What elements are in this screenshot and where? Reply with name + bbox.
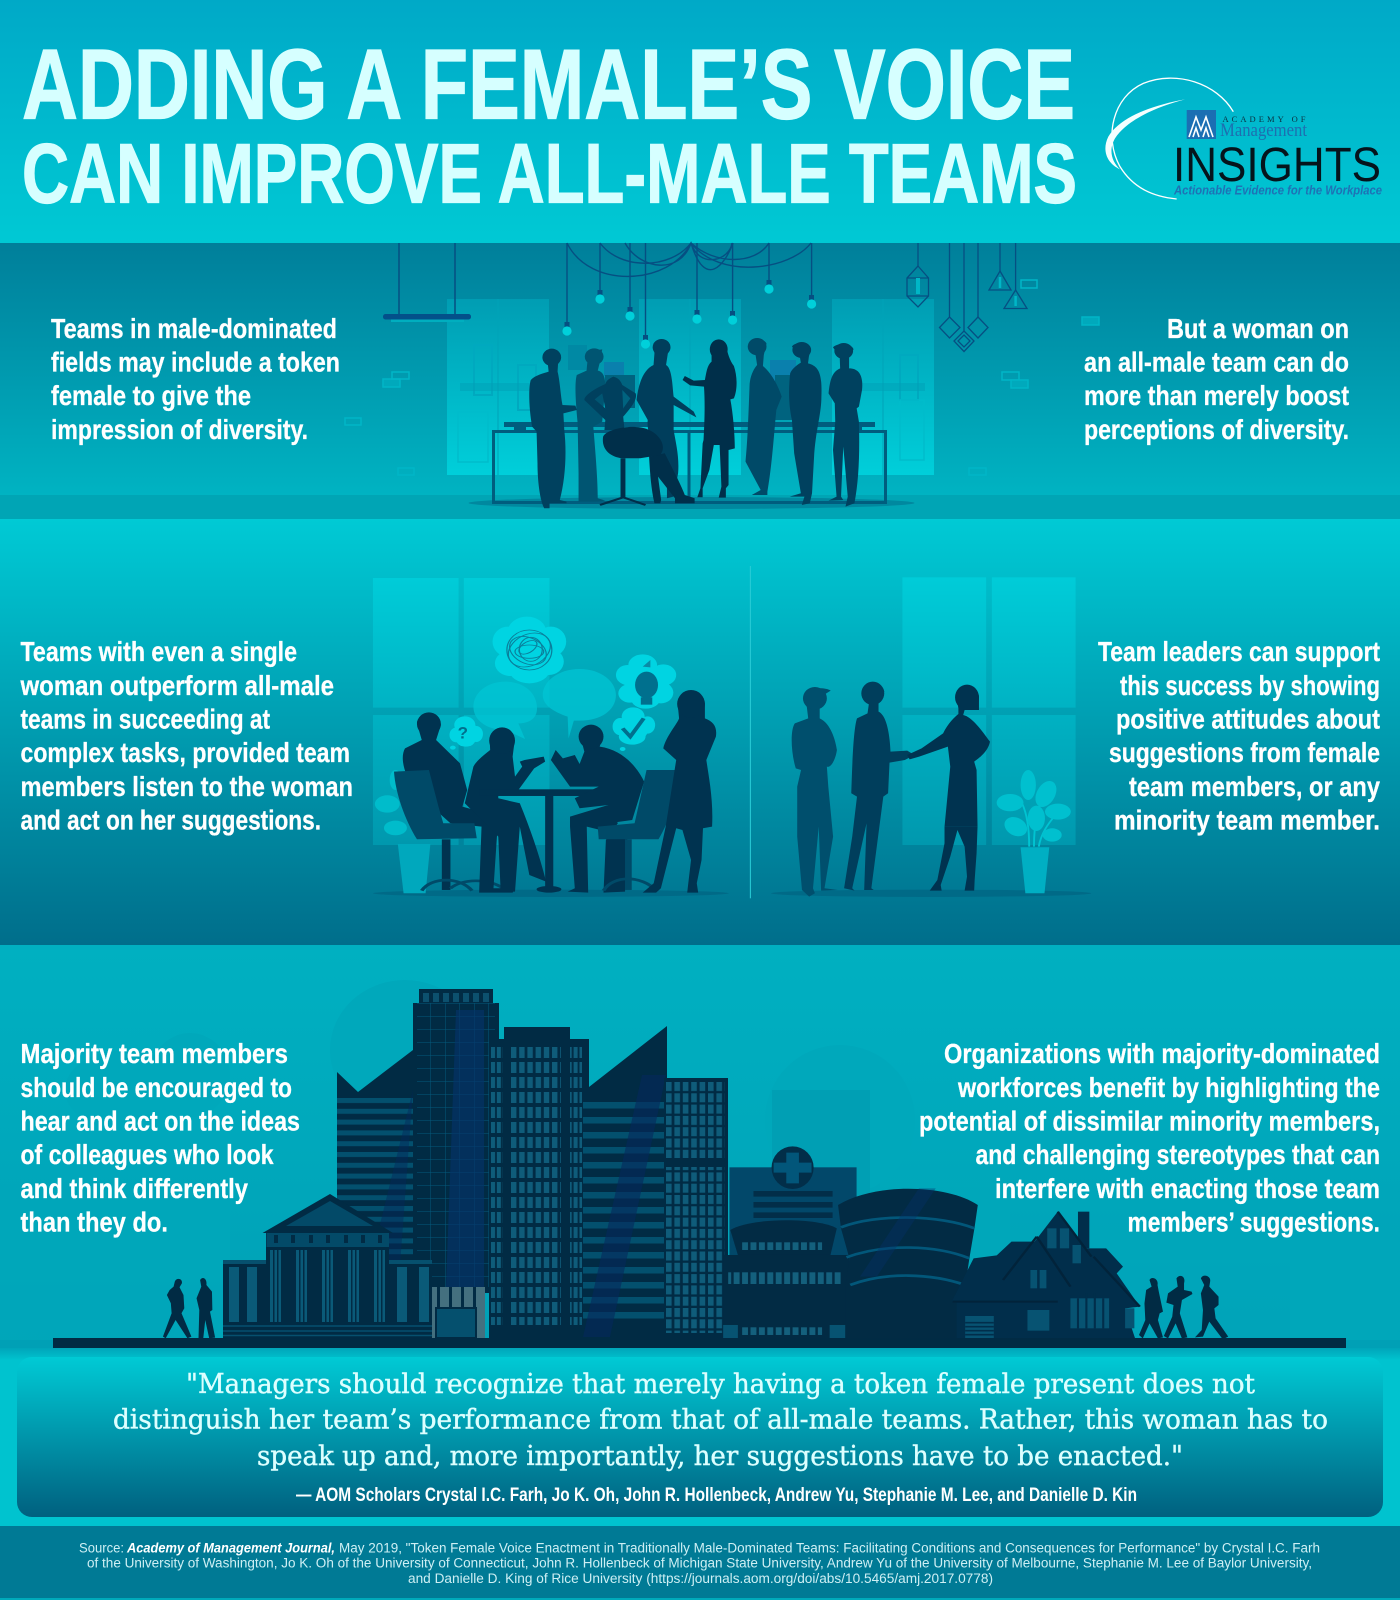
windowed tower [489, 1027, 589, 1338]
person: seated with chair [584, 377, 695, 505]
thought cloud: question mark [449, 716, 483, 750]
office windows [447, 299, 934, 475]
man shaking hands [844, 682, 914, 891]
quote text [113, 1369, 1328, 1472]
thought cloud: check mark [613, 707, 655, 751]
text: section 3 left: than they do. [20, 1206, 168, 1238]
scene divider [750, 566, 751, 898]
source note: and Danielle D. King of Rice University (https://journals.aom.org/doi/abs/10.5465/amj.2017.0778) [408, 1571, 993, 1586]
ceiling lamp [383, 243, 471, 322]
text: section 1 right [1084, 313, 1349, 445]
windows [373, 577, 1076, 845]
footer background [0, 1526, 1400, 1600]
person: man gesturing [529, 349, 577, 508]
right block tower [664, 1078, 728, 1338]
ground line [53, 1338, 1346, 1348]
text: section 2 left [20, 636, 353, 836]
source note [79, 1541, 1320, 1586]
source note: May 2019, "Token Female Voice Enactment in Traditionally Male-Dominated Teams: Facilitating Conditions and Consequences for Performance" by Crystal I.C. Farh [339, 1541, 1320, 1556]
standing woman [643, 690, 716, 893]
source note: of the University of Washington, Jo K. Oh of the University of Connecticut, John R. Hollenbeck of Michigan State University, Andrew Yu of the University of Melbourne, Stephanie M. Lee of Baylor University, [87, 1556, 1312, 1571]
text: section 2 left: complex tasks, provided team [20, 737, 350, 768]
walkers right [1139, 1276, 1228, 1339]
text: section 3 left: and think differently [20, 1173, 248, 1204]
right wedge tower [583, 1026, 667, 1338]
source note: Academy of Management Journal, [126, 1541, 335, 1556]
source note: Source: [79, 1541, 124, 1556]
section 3 background [0, 945, 1400, 1350]
geometric pendants [907, 243, 1027, 352]
illustration: team meeting and handshake [373, 566, 1091, 898]
title [22, 28, 1077, 220]
section 2 background [0, 519, 1400, 945]
quote section background [0, 1360, 1400, 1526]
chair left [422, 839, 503, 891]
text: section 1 left: impression of diversity. [51, 414, 308, 445]
illustration: city skyline [53, 989, 1346, 1348]
hospital [723, 1146, 946, 1340]
quote panel [17, 1357, 1383, 1517]
text: section 3 left [20, 1038, 300, 1238]
quote text: speak up and, more importantly, her suggestions have to be enacted." [257, 1441, 1183, 1472]
text: section 1 right: an all-male team can do [1084, 346, 1349, 378]
text: section 2 left: teams in succeeding at [20, 704, 270, 734]
title: ADDING A FEMALE’S VOICE [22, 28, 1075, 140]
logo: AOM Insights: INSIGHTS [1173, 139, 1381, 192]
walkers left [163, 1278, 215, 1338]
plant right [997, 770, 1071, 893]
ground shadows [373, 890, 1091, 897]
chair back left [394, 770, 477, 839]
thought cloud: question mark: ? [458, 723, 468, 742]
tudor house [952, 1212, 1140, 1341]
section 1 floor [0, 495, 1400, 519]
classical temple [223, 1194, 432, 1338]
person: man standing [746, 338, 782, 495]
text: section 1 left: fields may include a token [51, 346, 340, 378]
text: section 1 right: perceptions of diversity. [1084, 414, 1349, 445]
quote attribution: — AOM Scholars Crystal I.C. Farh, Jo K. Oh, John R. Hollenbeck, Andrew Yu, Stephanie M. Lee, and Danielle D. Kin [296, 1484, 1137, 1506]
text: section 1 left: female to give the [51, 380, 251, 411]
text: section 1 left: Teams in male-dominated [51, 313, 337, 344]
floor shadow [468, 497, 914, 509]
person: back colleague [575, 348, 605, 502]
wall bricks [345, 280, 1099, 475]
person: woman presenting [683, 339, 737, 498]
quote text: "Managers should recognize that merely having a token female present does not [186, 1369, 1255, 1400]
section 1 background [0, 243, 1400, 519]
text: section 3 left: hear and act on the ideas [20, 1106, 300, 1136]
person: man far right [829, 343, 862, 507]
text: section 2 left: and act on her suggestions. [20, 804, 321, 836]
man seated left [403, 712, 515, 893]
thought cloud: light bulb [616, 654, 676, 709]
hanging bulbs and wires [562, 243, 816, 349]
quote section fade [0, 1348, 1400, 1360]
text: section 3 left: of colleagues who look [20, 1139, 274, 1170]
monitors [568, 345, 805, 420]
meeting table [479, 789, 601, 893]
logo: AOM Insights: Actionable Evidence for the Workplace [1173, 183, 1382, 197]
text: section 1 right: more than merely boost [1084, 380, 1349, 411]
logo swoosh [1105, 78, 1233, 199]
domed museum [838, 1188, 978, 1340]
text: section 2 right [1098, 636, 1380, 836]
person: man with bun [637, 339, 696, 498]
title: CAN IMPROVE ALL-MALE TEAMS [22, 126, 1077, 220]
text: section 3 right [919, 1038, 1380, 1238]
low-rise group in local coordinates [723, 1146, 1228, 1341]
text: section 3 left: should be encouraged to [20, 1072, 292, 1103]
office figures [529, 338, 862, 508]
header background [0, 0, 1400, 243]
logo: AOM Insights [1105, 78, 1382, 199]
person: man centre right [789, 342, 822, 505]
text: section 2 left: members listen to the woman [20, 771, 353, 802]
thought cloud: tangled idea [493, 617, 566, 683]
plant left [375, 770, 430, 893]
illustration: office team [345, 243, 1099, 509]
text: section 3 left: Majority team members [20, 1038, 288, 1069]
quote text: distinguish her team’s performance from that of all-male teams. Rather, this woman has to [113, 1404, 1328, 1436]
speech bubble [543, 669, 616, 738]
text: section 1 right: But a woman on [1167, 313, 1349, 344]
chair right [598, 770, 681, 891]
man seated right [551, 725, 644, 893]
city background shapes [0, 980, 1400, 1340]
woman shaking hands [907, 685, 990, 891]
bottom strip [0, 1598, 1400, 1600]
desk [494, 422, 886, 503]
speech bubble [473, 682, 537, 739]
text: section 2 left: Teams with even a single [20, 636, 297, 667]
logo: AOM Insights: Management [1220, 121, 1308, 141]
woman seated [465, 727, 546, 892]
logo mark [1187, 110, 1216, 139]
central glass tower [413, 989, 499, 1338]
text: section 2 left: woman outperform all-male [20, 670, 334, 701]
man with arms crossed [792, 687, 838, 897]
left wedge tower [337, 1050, 413, 1300]
text: section 1 left [51, 313, 340, 445]
logo: AOM Insights: ACADEMY OF [1222, 114, 1306, 124]
